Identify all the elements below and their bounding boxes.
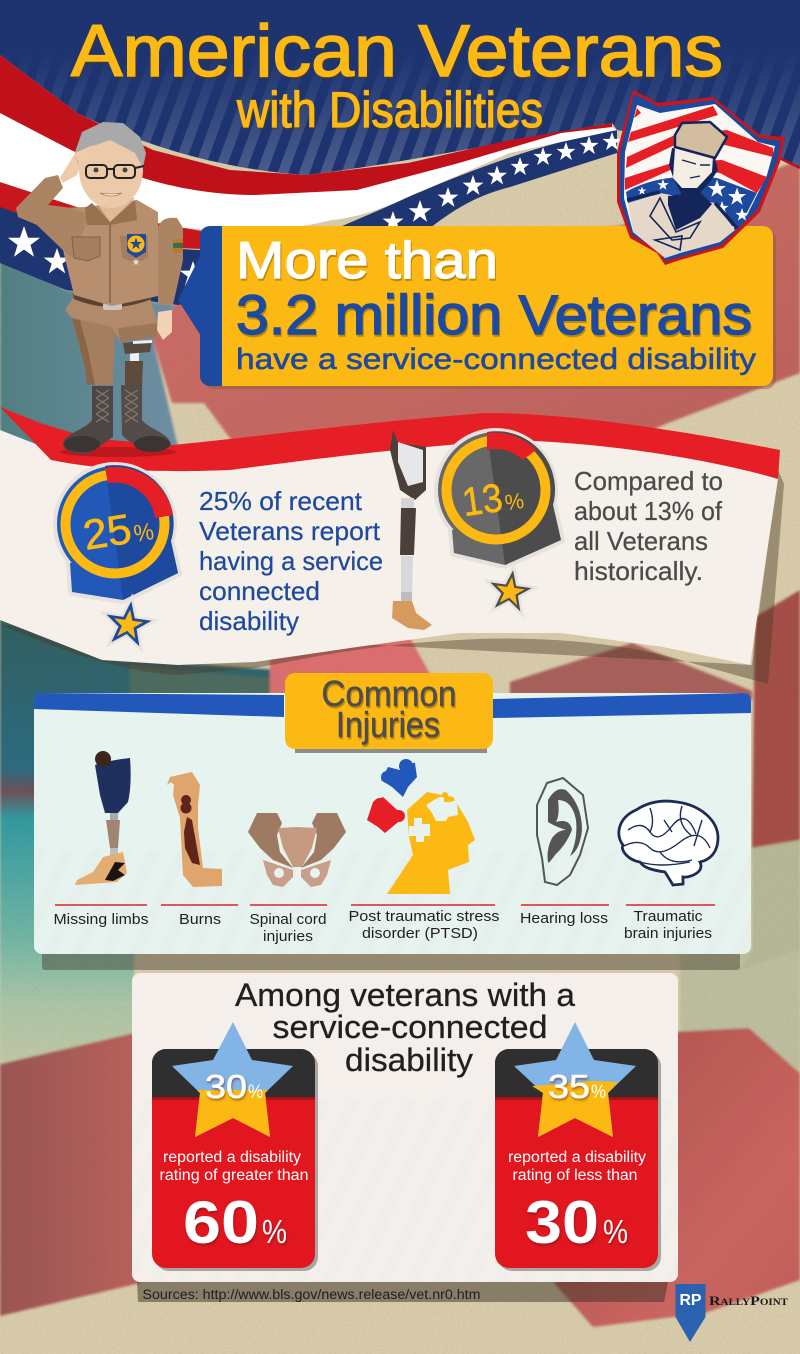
callout: 3.2 million veterans: 3.2 million Veterans	[236, 283, 752, 346]
collar	[85, 200, 137, 225]
eyes	[94, 168, 128, 172]
glasses	[86, 165, 144, 178]
medal: 25%: %	[132, 518, 156, 548]
icon: burned arm	[167, 772, 222, 887]
medal pale border	[57, 466, 178, 600]
medal star: 25%	[94, 589, 163, 655]
panel background	[132, 973, 678, 1282]
hanging arm	[158, 218, 183, 305]
card: less than 30%: rating of less than	[512, 1167, 638, 1184]
medal star: 13%	[478, 558, 542, 620]
shield soldier head	[669, 148, 718, 196]
logo: RallyPoint	[676, 1284, 788, 1342]
text: 25% of recent veterans: having a service	[199, 546, 383, 576]
card: greater than 60%: %	[262, 1213, 287, 1250]
boots	[63, 385, 171, 454]
icon: ear	[537, 778, 588, 885]
text: compared to 13%: about 13% of	[574, 496, 723, 526]
text: 25% of recent veterans	[199, 486, 383, 636]
heading box: Common	[322, 673, 456, 714]
panel heading: disability	[345, 1042, 473, 1078]
icon: pelvis	[248, 813, 346, 887]
medal: 13%	[438, 431, 561, 565]
boot shadow	[60, 447, 176, 457]
label: PTSD	[348, 908, 500, 942]
star fill gauge	[172, 1022, 293, 1137]
ribbon cream body	[0, 430, 778, 665]
card: less than 30%	[495, 1022, 661, 1271]
medal: 25%: 25	[80, 505, 135, 559]
badge	[120, 234, 148, 265]
raising arm	[16, 175, 90, 258]
icon: brain	[619, 801, 718, 885]
label: missing limbs: Missing limbs	[54, 911, 148, 928]
card: less than 30%: %	[591, 1082, 606, 1103]
logo: RallyPoint: RP	[680, 1292, 702, 1309]
card: greater than 60%: reported a disability	[163, 1149, 301, 1166]
callout: 3.2 million veterans	[178, 226, 776, 389]
icon: soldier shield emblem	[617, 90, 785, 265]
label: PTSD: disorder (PTSD)	[362, 925, 478, 942]
panel: disability ratings	[132, 973, 678, 1302]
arm patch	[173, 239, 183, 253]
panel heading: Among veterans with a	[235, 977, 575, 1013]
shield soldier torso	[628, 193, 735, 258]
title: with Disabilities	[236, 82, 543, 138]
red stripe	[0, 55, 612, 195]
heading box	[285, 673, 493, 749]
text: compared to 13%: all Veterans	[574, 526, 708, 556]
ribbon panel: stats	[0, 407, 784, 684]
label: PTSD: Post traumatic stress	[348, 908, 500, 925]
text: 25% of recent veterans: Veterans report	[199, 516, 381, 546]
belt	[73, 293, 152, 307]
sky stripes	[34, 74, 800, 175]
white stripe	[0, 113, 617, 230]
medal: 25%	[57, 465, 178, 600]
text: 25% of recent veterans: 25% of recent	[199, 486, 363, 516]
heading box: Injuries	[336, 704, 440, 745]
illustration: saluting veteran with prosthetic leg	[16, 122, 183, 457]
label: hearing loss: Hearing loss	[520, 910, 608, 927]
label: traumatic brain injuries: brain injuries	[624, 925, 712, 942]
callout pointer	[178, 254, 201, 336]
salute fingers overlap hair	[75, 145, 93, 167]
card: less than 30%: reported a disability	[508, 1149, 646, 1166]
card: greater than 60%: rating of greater than	[160, 1167, 308, 1184]
shield stripes	[625, 106, 773, 193]
label: spinal cord injuries: Spinal cord	[250, 911, 326, 928]
center seam	[109, 224, 111, 303]
navy sky	[0, 0, 800, 175]
ribbon red top	[0, 407, 780, 479]
neck	[93, 198, 135, 222]
card: less than 30%: 35	[548, 1068, 590, 1105]
text: compared to 13%: historically.	[574, 556, 703, 586]
text: compared to 13%: Compared to	[574, 466, 723, 496]
panel heading: service-connected	[272, 1009, 548, 1045]
panel shadow	[42, 950, 740, 970]
text: 25% of recent veterans: disability	[199, 606, 299, 636]
title	[71, 11, 723, 138]
panel heading	[235, 977, 575, 1078]
icon: PTSD puzzle head	[367, 759, 475, 894]
callout: 3.2 million veterans: have a service-connected disability	[236, 343, 756, 376]
label: spinal cord injuries: injuries	[263, 928, 313, 945]
medal: 13%: %	[503, 488, 525, 515]
medal pale border	[438, 432, 561, 565]
prosthetic leg	[123, 340, 152, 386]
flag banner behind the header	[0, 0, 800, 305]
panel: common injuries	[34, 673, 751, 970]
callout shadow and box	[204, 229, 776, 389]
salute hand	[60, 145, 93, 183]
label: traumatic brain injuries: Traumatic	[634, 908, 703, 925]
mouth	[100, 193, 122, 196]
label: burns: Burns	[179, 911, 221, 928]
face	[79, 132, 143, 208]
card: greater than 60%: 60	[183, 1189, 259, 1256]
card: greater than 60%: 30	[205, 1068, 247, 1105]
title: American Veterans	[71, 11, 723, 92]
thin red line right of shield	[775, 156, 800, 168]
card: less than 30%: %	[603, 1213, 628, 1250]
trousers	[72, 318, 115, 385]
card: less than 30%: 30	[525, 1189, 599, 1256]
shield soldier cap	[675, 122, 727, 158]
ribbon shadow	[0, 470, 784, 684]
label: traumatic brain injuries	[624, 908, 712, 942]
shield star field	[626, 177, 757, 226]
card: greater than 60%	[152, 1022, 318, 1271]
label: spinal cord injuries	[250, 911, 326, 945]
icon: prosthetic leg	[390, 430, 432, 630]
medal: 13%: 13	[460, 476, 505, 525]
divider lines	[55, 904, 715, 906]
lower navy band left	[0, 205, 205, 305]
right navy star band	[330, 130, 617, 232]
panel blue header band	[34, 693, 751, 718]
callout text: More than	[236, 232, 498, 290]
hair	[75, 122, 146, 168]
logo: RallyPoint: RallyPoint	[709, 1293, 788, 1308]
red stripe under white	[0, 182, 225, 250]
pocket	[72, 237, 100, 261]
star fill gauge	[514, 1022, 636, 1137]
panel shadow	[137, 1282, 668, 1302]
sources line: Sources: http://www.bls.gov/news.release/vet.nr0.htm	[142, 1287, 480, 1302]
icon: missing limb	[75, 751, 131, 885]
card: greater than 60%: %	[248, 1082, 263, 1103]
text: compared to 13%	[574, 466, 723, 586]
text: 25% of recent veterans: connected	[199, 576, 320, 606]
heading shadow	[295, 745, 487, 753]
band stars	[8, 132, 622, 286]
shield outline	[617, 90, 785, 265]
jacket body	[37, 200, 158, 306]
panel background	[34, 693, 751, 954]
